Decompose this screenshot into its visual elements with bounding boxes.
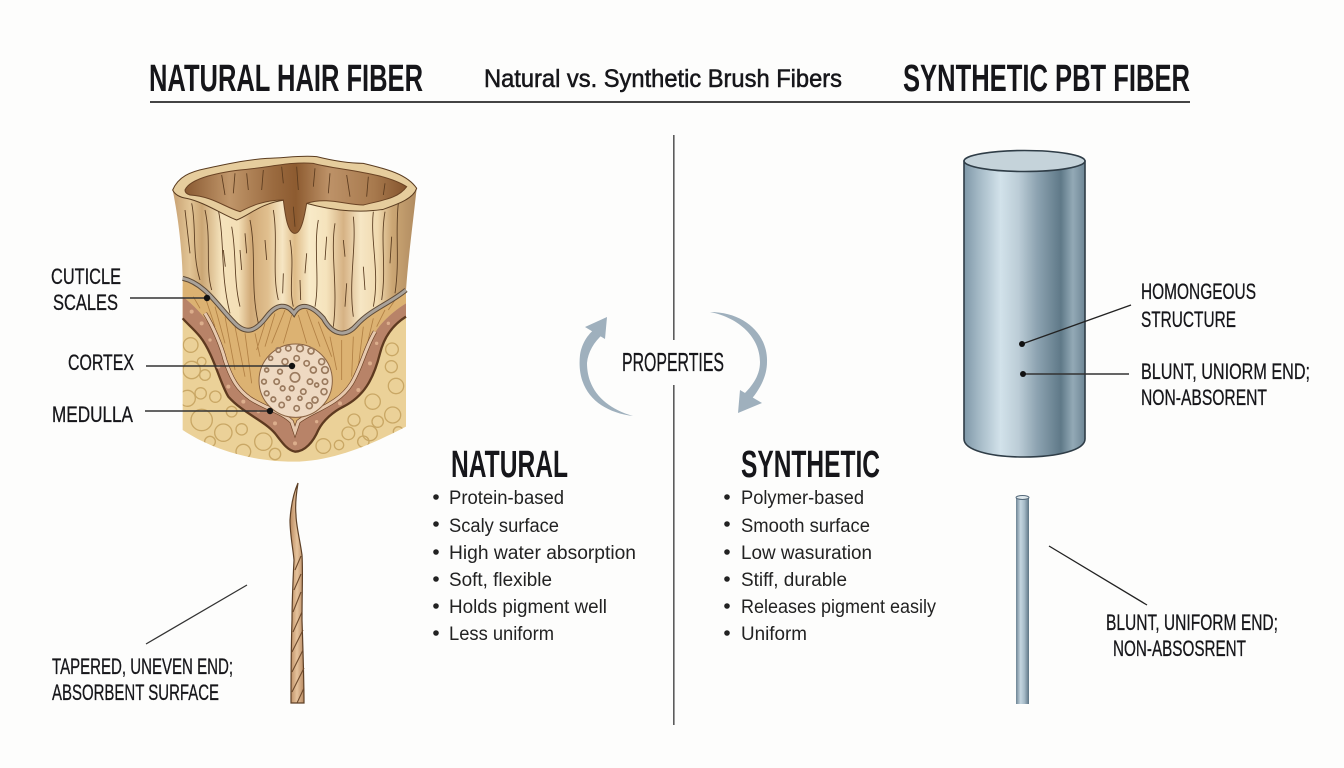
callout: homogeneous structure <box>1019 279 1256 347</box>
label: medulla <box>52 402 273 427</box>
opening grain <box>222 167 385 227</box>
callout: blunt uniorm end <box>1020 359 1310 410</box>
arrow: left curved <box>580 317 633 416</box>
label: blunt uniform end: BLUNT, UNIFORM END; <box>1106 610 1278 635</box>
callout line: rod end <box>1049 546 1147 605</box>
column: natural properties: NATURAL <box>451 444 568 486</box>
callout: homogeneous structure: HOMONGEOUS <box>1141 279 1256 304</box>
label: tapered uneven end: ABSORBENT SURFACE <box>52 680 219 705</box>
label: properties: PROPERTIES <box>622 347 724 377</box>
callout: homogeneous structure: STRUCTURE <box>1141 307 1236 332</box>
column: synthetic properties: SYNTHETIC <box>741 444 880 486</box>
column: natural properties <box>433 444 636 645</box>
medulla circle <box>259 344 332 417</box>
column: synthetic properties: Polymer-based <box>741 488 864 509</box>
label: cortex <box>68 350 295 375</box>
column: natural properties: Scaly surface <box>449 516 559 537</box>
top rim <box>173 156 417 220</box>
label: tapered uneven end: TAPERED, UNEVEN END; <box>52 654 233 679</box>
column: synthetic properties <box>724 444 936 645</box>
column: natural properties: Less uniform <box>449 624 554 645</box>
title: synthetic pbt fiber: SYNTHETIC PBT FIBER <box>903 58 1190 100</box>
shaft grain <box>185 203 398 327</box>
illustration: synthetic cylinder <box>964 150 1085 457</box>
label: cuticle scales: CUTICLE <box>51 264 121 289</box>
title: natural vs synthetic brush fibers: Natural vs. Synthetic Brush Fibers <box>484 65 842 93</box>
center divider <box>673 135 675 725</box>
synthetic bullets <box>724 494 730 636</box>
column: synthetic properties: Uniform <box>741 624 807 645</box>
column: synthetic properties: Stiff, durable <box>741 570 847 591</box>
base yellow tissue <box>183 287 406 462</box>
band outer edge <box>183 317 406 452</box>
illustration: tapered natural hair <box>290 483 304 703</box>
grey cuticle band <box>183 278 406 333</box>
outer shaft <box>173 156 417 333</box>
callout line: tapered end <box>146 585 247 644</box>
arrow: right curved <box>710 312 767 413</box>
label: medulla: MEDULLA <box>52 402 133 427</box>
label: cuticle scales <box>51 264 210 315</box>
band speckles <box>190 310 390 445</box>
column: synthetic properties: Smooth surface <box>741 516 870 537</box>
label: blunt uniform end <box>1106 610 1278 661</box>
tissue bubbles <box>179 338 404 460</box>
illustration: synthetic thin rod <box>1016 496 1029 704</box>
column: natural properties: Protein-based <box>449 488 564 509</box>
cortex streaks <box>193 297 395 383</box>
callout: blunt uniorm end: NON-ABSORENT <box>1141 385 1267 410</box>
column: natural properties: Holds pigment well <box>449 597 607 618</box>
fiber opening <box>185 163 407 233</box>
inner pale membrane <box>205 313 375 432</box>
column: synthetic properties: Low wasuration <box>741 543 872 564</box>
natural bullets <box>433 494 439 636</box>
column: natural properties: Soft, flexible <box>449 570 552 591</box>
header rule <box>150 101 1190 103</box>
title: natural hair fiber: NATURAL HAIR FIBER <box>149 58 423 100</box>
label: blunt uniform end: NON-ABSOSRENT <box>1113 636 1246 661</box>
cortex fill <box>183 278 406 433</box>
illustration: natural hair cross-section <box>173 156 417 462</box>
label: cuticle scales: SCALES <box>53 290 118 315</box>
label: tapered uneven end <box>52 654 233 705</box>
brown band <box>183 297 406 452</box>
label: cortex: CORTEX <box>68 350 134 375</box>
column: synthetic properties: Releases pigment easily <box>741 597 936 618</box>
medulla cells <box>262 345 328 411</box>
column: natural properties: High water absorption <box>449 543 636 564</box>
